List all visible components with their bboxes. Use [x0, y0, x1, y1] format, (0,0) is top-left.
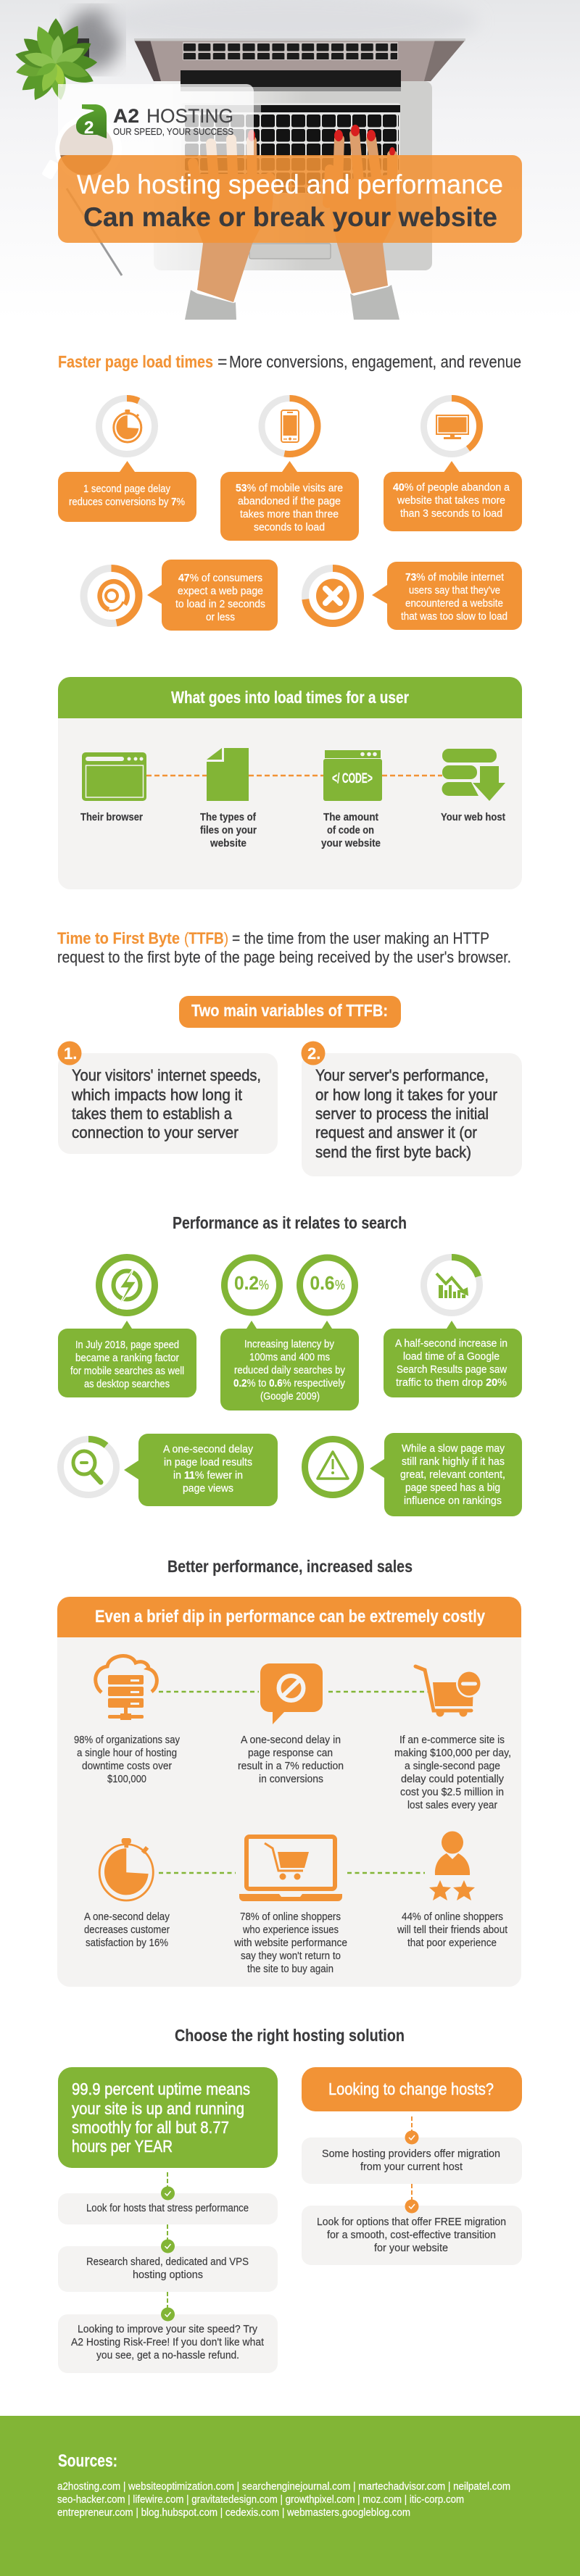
- donut 0.2%: %: [259, 1278, 269, 1292]
- icon: browser: [82, 752, 146, 801]
- logo: A2 Hosting: [76, 104, 233, 138]
- tip 3: [58, 2308, 278, 2373]
- panel: costly dip: with website performance: [233, 1937, 347, 1949]
- panel: costly dip: making $100,000 per day,: [394, 1747, 511, 1759]
- stat: slow page warning: still rank highly if it has: [402, 1455, 505, 1468]
- heading: faster page load times: More conversions, engagement, and revenue: [229, 352, 521, 371]
- icon: cloud server: [96, 1656, 157, 1720]
- panel: costly dip: page response can: [248, 1747, 333, 1759]
- hero photo: [0, 0, 580, 320]
- donut 0.6%: [300, 1258, 355, 1313]
- donut 0.2%: 0.2: [234, 1272, 259, 1294]
- tip 1: [58, 2186, 278, 2224]
- icon: cart with minus: [415, 1666, 482, 1716]
- card: variable 2: or how long it takes for your: [315, 1086, 497, 1104]
- panel: what goes into load times: Their browser: [80, 811, 143, 823]
- stat: latency: reduced daily searches by: [234, 1364, 345, 1376]
- heading: better performance: Better performance, increased sales: [167, 1557, 413, 1576]
- panel: uptime callout: 99.9 percent uptime means: [72, 2080, 250, 2098]
- tip 2: hosting options: [133, 2269, 203, 2281]
- card: variable 1: which impacts how long it: [71, 1086, 242, 1104]
- panel: costly dip: 44% of online shoppers: [402, 1911, 503, 1923]
- panel: looking to change hosts: [302, 2067, 522, 2111]
- stat: latency: 100ms and 400 ms: [249, 1351, 330, 1363]
- TTFB definition: [57, 929, 511, 966]
- panel: costly dip: 98% of organizations say: [74, 1734, 180, 1746]
- TTFB definition: = the time from the user making an HTTP: [232, 929, 489, 947]
- panel: costly dip: satisfaction by 16%: [86, 1937, 168, 1949]
- panel: costly dip: downtime costs over: [82, 1760, 172, 1772]
- stat: 47% consumers: [84, 560, 278, 631]
- stat: half-second traffic drop: traffic to them drop 20%: [396, 1376, 507, 1389]
- icon: speech bubble blocked: [260, 1663, 323, 1724]
- stat: page speed ranking: became a ranking factor: [75, 1352, 179, 1364]
- icon: person with stars: [429, 1831, 475, 1900]
- panel: what goes into load times: Your web host: [441, 811, 505, 823]
- migration tip 2: [302, 2199, 522, 2265]
- panel: what goes into load times: of code on: [327, 824, 374, 836]
- plant: [14, 18, 97, 104]
- tip 1: Look for hosts that stress performance: [86, 2202, 249, 2214]
- stat: 53% mobile: takes more than three: [240, 508, 339, 520]
- stat: half-second traffic drop: load time of a Google: [403, 1350, 500, 1363]
- icon: bolt: [99, 1257, 155, 1313]
- panel: what goes into load times: [58, 677, 522, 889]
- stat: 73% mobile users: 73% of mobile internet: [405, 571, 505, 583]
- card: variable 1: connection to your server: [72, 1123, 239, 1142]
- panel: looking to change hosts: Looking to change hosts?: [328, 2080, 494, 2098]
- tip 2: Research shared, dedicated and VPS: [86, 2256, 249, 2268]
- donut 7% with stopwatch: [99, 399, 155, 454]
- sleeves: [185, 285, 399, 320]
- card: variable 1: [58, 1041, 278, 1154]
- TTFB definition: Time to First Byte: [57, 929, 180, 947]
- stat: 47% consumers: or less: [206, 611, 235, 623]
- stat: 7% conversions: [58, 399, 196, 522]
- panel: uptime callout: your site is up and running: [72, 2099, 244, 2118]
- panel: costly dip: Even a brief dip in performance can be extremely costly: [95, 1607, 486, 1626]
- panel: costly dip: 78% of online shoppers: [240, 1911, 341, 1923]
- stat: 40% abandon: than 3 seconds to load: [400, 507, 502, 520]
- donut 0.6%: %: [335, 1278, 345, 1292]
- footer: sources: [0, 2416, 580, 2576]
- icon: warning: [304, 1439, 361, 1495]
- card: variable 2: send the first byte back): [315, 1143, 471, 1161]
- card: variable 1: 1.: [64, 1044, 77, 1063]
- stat: 11% fewer page views: in 11% fewer in: [173, 1469, 243, 1482]
- stat: latency: 0.2% to 0.6% respectively: [233, 1377, 345, 1389]
- stat: page speed ranking: [58, 1257, 196, 1397]
- panel: costly dip: result in a 7% reduction: [238, 1760, 344, 1772]
- migration tip 2: Look for options that offer FREE migration: [317, 2216, 506, 2228]
- panel: what goes into load times: The amount: [323, 811, 378, 823]
- panel: uptime callout: smoothly for all but 8.77: [72, 2118, 229, 2137]
- column: uptime tips: [58, 2067, 278, 2373]
- heading: choose hosting: Choose the right hosting solution: [175, 2026, 405, 2045]
- donut 53% with phone: [262, 399, 318, 454]
- heading: performance and search: Performance as it relates to search: [173, 1213, 407, 1232]
- donut 40% with monitor: [423, 399, 480, 454]
- stat: half-second traffic drop: [384, 1257, 522, 1397]
- icon: laptop with cart: [239, 1837, 342, 1901]
- panel: uptime callout: hours per YEAR: [72, 2137, 173, 2156]
- panel: costly dip: who experience issues: [242, 1924, 339, 1936]
- icon: file: [207, 748, 249, 801]
- footer: sources: entrepreneur.com | blog.hubspot.com | cedexis.com | webmasters.googleblog.com: [57, 2506, 410, 2519]
- migration tip 1: from your current host: [360, 2161, 463, 2173]
- panel: costly dip: lost sales every year: [407, 1799, 497, 1811]
- card: variable 2: server to process the initial: [315, 1105, 489, 1123]
- logo panel: [58, 84, 254, 155]
- stat: slow page warning: influence on rankings: [404, 1495, 502, 1507]
- migration tip 2: for your website: [374, 2242, 448, 2254]
- logo: A2 Hosting: HOSTING: [146, 105, 233, 127]
- panel: costly dip: delay could potentially: [401, 1773, 504, 1785]
- panel: costly dip: decreases customer: [84, 1924, 170, 1936]
- stat: 47% consumers: to load in 2 seconds: [175, 598, 265, 610]
- panel: costly dip: will tell their friends about: [397, 1924, 508, 1936]
- card: variable 2: 2.: [307, 1044, 320, 1063]
- stat: 11% fewer page views: [61, 1434, 278, 1506]
- pen: [67, 188, 122, 275]
- stat: page speed ranking: as desktop searches: [84, 1378, 170, 1390]
- panel: what goes into load times: What goes into load times for a user: [171, 688, 409, 707]
- donut 0.6%: 0.6: [310, 1272, 335, 1294]
- tip 2: [58, 2240, 278, 2292]
- tip 3: Looking to improve your site speed? Try: [78, 2323, 257, 2335]
- donut 47% with target: [84, 568, 139, 623]
- stat: 11% fewer page views: in page load results: [164, 1456, 252, 1468]
- title banner: Web hosting speed and performance: [77, 170, 503, 199]
- card: variable 1: takes them to establish a: [72, 1105, 233, 1123]
- stat: 11% fewer page views: A one-second delay: [163, 1443, 253, 1455]
- panel: costly dip: $100,000: [107, 1773, 146, 1785]
- panel: costly dip: A one-second delay in: [241, 1734, 341, 1746]
- stat: 53% mobile: 53% of mobile visits are: [236, 482, 343, 494]
- stat: 11% fewer page views: page views: [183, 1482, 233, 1495]
- title banner: [58, 155, 522, 243]
- stat: slow page warning: [304, 1433, 522, 1516]
- card: variable 2: Your server's performance,: [315, 1066, 489, 1084]
- heading: faster page load times: Faster page load times: [58, 352, 213, 371]
- footer: sources: Sources:: [58, 2451, 117, 2471]
- panel: what goes into load times: The types of: [200, 811, 257, 823]
- panel: uptime callout: [58, 2067, 278, 2168]
- stat: latency: (Google 2009): [260, 1390, 320, 1403]
- donut 73% with X: [305, 568, 360, 623]
- panel: costly dip: [57, 1597, 521, 1987]
- stat: page speed ranking: for mobile searches as well: [70, 1365, 184, 1377]
- stat: 73% mobile users: that was too slow to load: [401, 610, 508, 623]
- stat: 53% mobile: [220, 399, 359, 541]
- donut 0.2%: [225, 1258, 280, 1313]
- coffee cup: [41, 115, 122, 182]
- logo: A2 Hosting: OUR SPEED, YOUR SUCCESS: [113, 127, 233, 137]
- title banner: Can make or break your website: [83, 202, 497, 232]
- stat: slow page warning: While a slow page may: [402, 1442, 505, 1455]
- stat: latency: Increasing latency by: [244, 1338, 334, 1350]
- icon: large stopwatch: [99, 1838, 153, 1900]
- stat: half-second traffic drop: A half-second increase in: [395, 1337, 508, 1350]
- stat: 73% mobile users: [305, 562, 522, 630]
- TTFB definition: (TTFB): [184, 929, 228, 947]
- card: variable 2: [302, 1041, 522, 1176]
- donut 20% with chart: [423, 1257, 480, 1313]
- icon: web host server: [442, 749, 505, 801]
- pill: two main variables: [179, 996, 401, 1028]
- migration tip 2: for a smooth, cost-effective transition: [327, 2229, 496, 2241]
- icon: code window: [323, 750, 382, 801]
- TTFB definition: request to the first byte of the page being received by the user's browser.: [57, 948, 511, 966]
- logo: A2 Hosting: A2: [113, 105, 139, 127]
- heading: faster page load times: =: [218, 352, 227, 371]
- stat: 73% mobile users: users say that they've: [409, 584, 500, 597]
- stat: 7% conversions: reduces conversions by 7%: [69, 496, 185, 508]
- logo: A2 Hosting: 2: [84, 118, 94, 138]
- stat: latency: [220, 1258, 359, 1410]
- icon: code window: </ CODE>: [332, 771, 373, 786]
- laptop: [134, 38, 465, 270]
- stat: 73% mobile users: encountered a website: [405, 597, 503, 610]
- panel: what goes into load times: files on your: [200, 824, 257, 836]
- panel: costly dip: the site to buy again: [247, 1963, 334, 1975]
- panel: what goes into load times: website: [210, 837, 246, 849]
- stat: 40% abandon: 40% of people abandon a: [393, 481, 510, 494]
- migration tip 1: Some hosting providers offer migration: [322, 2148, 500, 2160]
- migration tip 1: [302, 2131, 522, 2184]
- column: changing hosts: [302, 2067, 522, 2265]
- panel: costly dip: cost you $2.5 million in: [400, 1786, 504, 1798]
- heading: faster page load times: [58, 352, 521, 371]
- stat: 7% conversions: 1 second page delay: [83, 483, 170, 495]
- hands: [185, 125, 399, 320]
- panel: costly dip: If an e-commerce site is: [399, 1734, 505, 1746]
- stat: 53% mobile: abandoned if the page: [238, 495, 341, 507]
- stat: 47% consumers: 47% of consumers: [178, 572, 262, 584]
- footer: sources: a2hosting.com | websiteoptimization.com | searchenginejournal.com | martechadvisor.com | neilpatel.com: [57, 2480, 510, 2493]
- panel: what goes into load times: your website: [321, 837, 381, 849]
- stat: page speed ranking: In July 2018, page speed: [75, 1339, 179, 1351]
- footer: sources: seo-hacker.com | lifewire.com | gravitatedesign.com | growthpixel.com | moz.com | itic-corp.com: [57, 2493, 464, 2506]
- panel: costly dip: a single hour of hosting: [77, 1747, 177, 1759]
- stat: 53% mobile: seconds to load: [254, 521, 325, 533]
- stat: 47% consumers: expect a web page: [178, 585, 263, 597]
- panel: costly dip: in conversions: [259, 1773, 323, 1785]
- stat: half-second traffic drop: Search Results page saw: [397, 1363, 507, 1376]
- stat: slow page warning: page speed has a big: [405, 1482, 500, 1494]
- panel: costly dip: A one-second delay: [84, 1911, 170, 1923]
- tip 3: A2 Hosting Risk-Free! If you don't like what: [71, 2336, 265, 2348]
- panel: costly dip: say they won't return to: [241, 1950, 341, 1962]
- stat: 40% abandon: website that takes more: [397, 494, 505, 507]
- tip 3: you see, get a no-hassle refund.: [96, 2349, 239, 2361]
- stat: slow page warning: great, relevant content,: [400, 1468, 505, 1481]
- donut 11% with magnifier: [61, 1439, 116, 1495]
- pill: two main variables: Two main variables of TTFB:: [191, 1001, 388, 1020]
- card: variable 1: Your visitors' internet speeds,: [72, 1066, 261, 1084]
- stat: 40% abandon: [384, 399, 522, 531]
- panel: costly dip: that poor experience: [407, 1937, 497, 1949]
- panel: costly dip: a single-second page: [405, 1760, 500, 1772]
- card: variable 2: request and answer it (or: [315, 1123, 477, 1142]
